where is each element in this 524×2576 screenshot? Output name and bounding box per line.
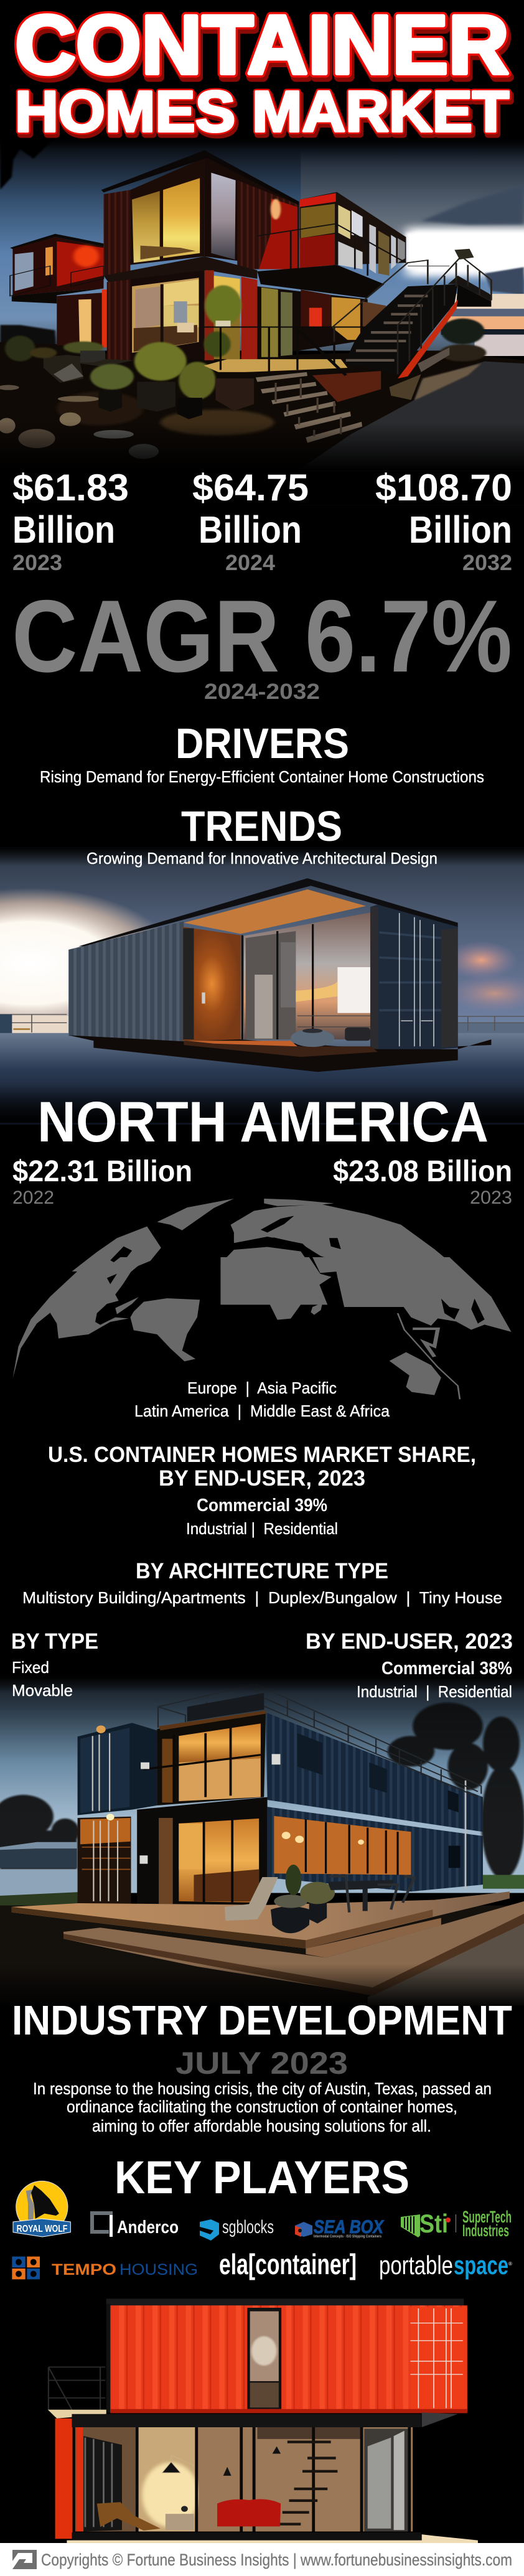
2023 value: Billion: [12, 508, 115, 551]
North America 2023: 2023: [470, 1187, 512, 1208]
title line 1 outline: CONTAINER: [15, 0, 509, 91]
by type heading: BY TYPE: [11, 1629, 98, 1654]
left small container: [10, 234, 107, 347]
trends text: Growing Demand for Innovative Architectural Design: [87, 849, 437, 868]
image: red stacked container house: [48, 2298, 478, 2544]
foliage: [5, 285, 241, 419]
logo: sgblocks: [200, 2217, 274, 2241]
date: JULY 2023: [175, 2046, 348, 2081]
red sofa: [217, 2499, 281, 2526]
2023 value: $61.83: [12, 467, 129, 508]
development text: ordinance facilitating the construction of container homes,: [67, 2097, 457, 2116]
logo: Royal Wolf: ROYAL WOLF: [17, 2224, 67, 2234]
image: two-storey red container home at dusk: [0, 136, 524, 505]
title: [15, 0, 511, 147]
by type items: Fixed: [12, 1658, 49, 1677]
lower glazed middle: [137, 1797, 268, 1906]
title line 1: CONTAINER: [15, 0, 509, 91]
2023 value: [12, 467, 129, 575]
glazing: [244, 912, 371, 1039]
rocks: [0, 385, 159, 459]
footer: [0, 2543, 524, 2576]
upper glazed middle: [157, 1712, 266, 1806]
main upper container: [101, 150, 299, 276]
North America 2022: 2022: [12, 1187, 54, 1208]
logo: SuperTech Industries: Sti: [419, 2209, 448, 2238]
logo: sgblocks: sgblocks: [222, 2217, 274, 2237]
drivers text: Rising Demand for Energy-Efficient Container Home Constructions: [40, 767, 484, 786]
development text: [33, 2079, 492, 2135]
wood ceiling: [184, 889, 366, 934]
logo: Anderco: [90, 2211, 179, 2237]
tree branch: [0, 136, 57, 190]
title line 2 shadow: HOMES MARKET: [17, 82, 511, 147]
deck: [12, 1891, 510, 1949]
drivers heading: DRIVERS: [175, 719, 349, 767]
architecture type items: Multistory Building/Apartments | Duplex/Bungalow | Tiny House: [22, 1588, 502, 1607]
spiral stairs: [276, 2442, 337, 2524]
lamp: [162, 2455, 194, 2473]
deck: [68, 1035, 491, 1072]
2024 value: $64.75: [192, 467, 309, 508]
footer logo: [12, 2550, 37, 2569]
2024 value: Billion: [199, 508, 302, 551]
by end-user other segments: Industrial | Residential: [357, 1682, 512, 1701]
logo: Royal Wolf: [13, 2181, 70, 2237]
image: single container home on water: [0, 847, 524, 1125]
U.S. market share heading: BY END-USER, 2023: [159, 1466, 365, 1491]
trends heading: TRENDS: [181, 802, 342, 850]
by type items: Movable: [12, 1681, 73, 1700]
North America 2023: $23.08 Billion: [333, 1155, 512, 1188]
North America 2022: [12, 1155, 192, 1208]
market size figures: [12, 467, 512, 575]
upper red container: [106, 2298, 467, 2413]
pots and furniture: [271, 1906, 310, 1933]
logo: Tempo Housing: [12, 2257, 198, 2279]
long side: [266, 1712, 483, 1832]
other regions: [134, 1379, 390, 1420]
warm window strip: [274, 1816, 411, 1875]
ground floor: [103, 256, 386, 362]
by type items: [12, 1658, 73, 1700]
world globe map: [12, 1199, 512, 1399]
roof rail: [158, 1684, 481, 1797]
logo: Sea Box: Intermodal Concepts · ISO Shipping Containers: [314, 2235, 382, 2239]
logo: portablespace: portable: [379, 2250, 453, 2280]
stairs and platform: [332, 249, 491, 378]
U.S. market share heading: U.S. CONTAINER HOMES MARKET SHARE,: [48, 1443, 476, 1467]
title line 1 shadow: CONTAINER: [17, 2, 511, 95]
2024 value: [192, 467, 309, 575]
by end-user heading: BY END-USER, 2023: [306, 1629, 513, 1654]
porch: [202, 327, 398, 411]
interior wall: [183, 927, 241, 1041]
logo: SuperTech Industries: [401, 2208, 512, 2240]
logo: portablespace: ®: [508, 2261, 512, 2267]
logo: Anderco: Anderco: [117, 2218, 179, 2237]
image: blue two-storey container home with deck: [0, 1676, 524, 2008]
upper right container: [257, 192, 406, 298]
North America 2022: $22.31 Billion: [12, 1155, 192, 1188]
logo: Tempo Housing: TEMPO: [52, 2261, 116, 2279]
2023 value: 2023: [12, 551, 62, 575]
door ends: [78, 1723, 157, 1815]
title line 2: HOMES MARKET: [15, 79, 509, 144]
logo: Sea Box: SEA BOX: [314, 2217, 385, 2237]
lower glazed container: [55, 2414, 421, 2541]
balcony rail: [49, 2367, 105, 2410]
2024 value: 2024: [225, 551, 276, 575]
CAGR period: 2024-2032: [204, 680, 320, 704]
region heading: NORTH AMERICA: [37, 1090, 489, 1154]
2032 value: [375, 467, 512, 575]
front steps: [256, 372, 362, 443]
U.S. commercial share: Commercial 39%: [197, 1496, 327, 1515]
U.S. other segments: Industrial | Residential: [186, 1519, 338, 1538]
architecture type heading: BY ARCHITECTURE TYPE: [136, 1559, 388, 1583]
other regions: Latin America | Middle East & Africa: [134, 1402, 390, 1420]
other regions: Europe | Asia Pacific: [187, 1379, 337, 1397]
trees: [0, 1703, 524, 1879]
planter: [291, 1029, 334, 1047]
U.S. market share heading: [48, 1443, 476, 1491]
development text: aiming to offer affordable housing solutions for all.: [92, 2117, 431, 2135]
container side: [68, 921, 184, 1042]
title line 2 outline: HOMES MARKET: [15, 79, 509, 144]
logo: ela container: ela[container]: [219, 2248, 357, 2280]
North America 2023: [333, 1155, 512, 1208]
2032 value: 2032: [462, 551, 512, 575]
by end-user commercial share: Commercial 38%: [381, 1659, 512, 1679]
ground: [0, 342, 524, 505]
logo: Tempo Housing: HOUSING: [119, 2261, 198, 2279]
logo: Sea Box: [295, 2217, 385, 2239]
door face: [370, 905, 458, 1053]
key players heading: KEY PLAYERS: [115, 2152, 409, 2203]
2032 value: $108.70: [375, 467, 512, 508]
2032 value: Billion: [409, 508, 512, 551]
